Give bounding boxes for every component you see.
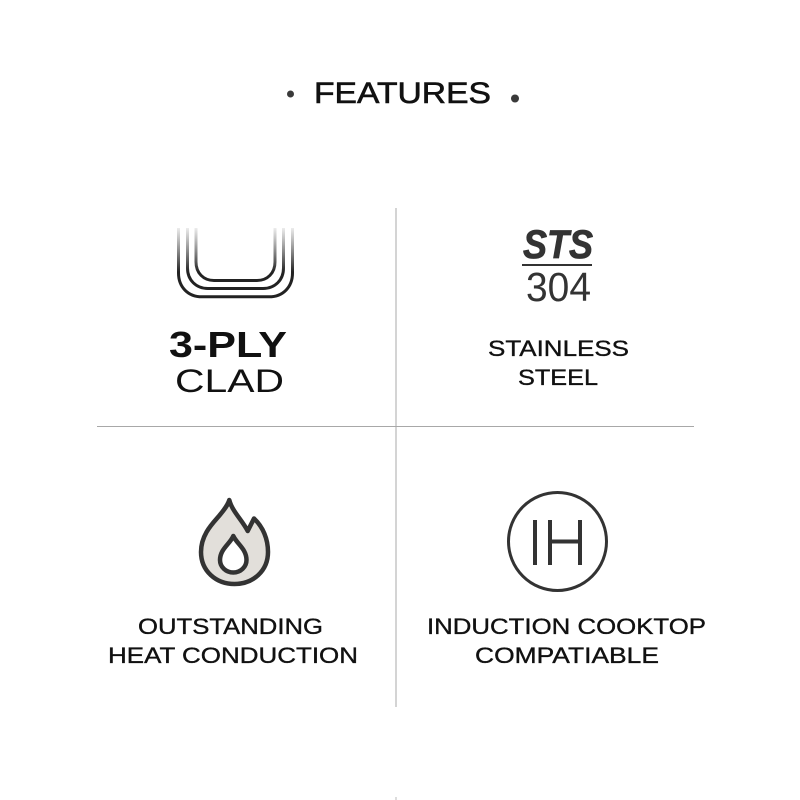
title <box>287 77 519 110</box>
label: stainless steel: STEEL <box>518 365 598 390</box>
label: induction cooktop compatiable: INDUCTION COOKTOP <box>427 614 706 639</box>
heading: 3-ply: 3-PLY <box>169 324 287 365</box>
icon: three-layer pot <box>178 228 292 297</box>
title: FEATURES <box>314 77 491 110</box>
label: outstanding heat conduction: OUTSTANDING <box>138 614 323 639</box>
label: stainless steel <box>488 336 629 390</box>
icon: STS 304: 304 <box>526 264 591 310</box>
panel: induction cooktop <box>427 492 706 668</box>
icon: STS 304: STS <box>523 223 593 267</box>
label: stainless steel: STAINLESS <box>488 336 629 361</box>
panel: 3-ply clad <box>169 228 292 399</box>
label: induction cooktop compatiable <box>427 614 706 668</box>
label: outstanding heat conduction <box>108 614 358 668</box>
icon: STS 304 <box>522 223 593 310</box>
icon: flame with drop <box>201 500 268 584</box>
panel: heat conduction <box>108 500 358 668</box>
label: induction cooktop compatiable: COMPATIABLE <box>475 643 659 668</box>
panel: stainless steel <box>488 223 629 390</box>
icon: IH circle <box>508 492 606 590</box>
label: clad: CLAD <box>175 363 284 399</box>
label: outstanding heat conduction: HEAT CONDUCTION <box>108 643 358 668</box>
